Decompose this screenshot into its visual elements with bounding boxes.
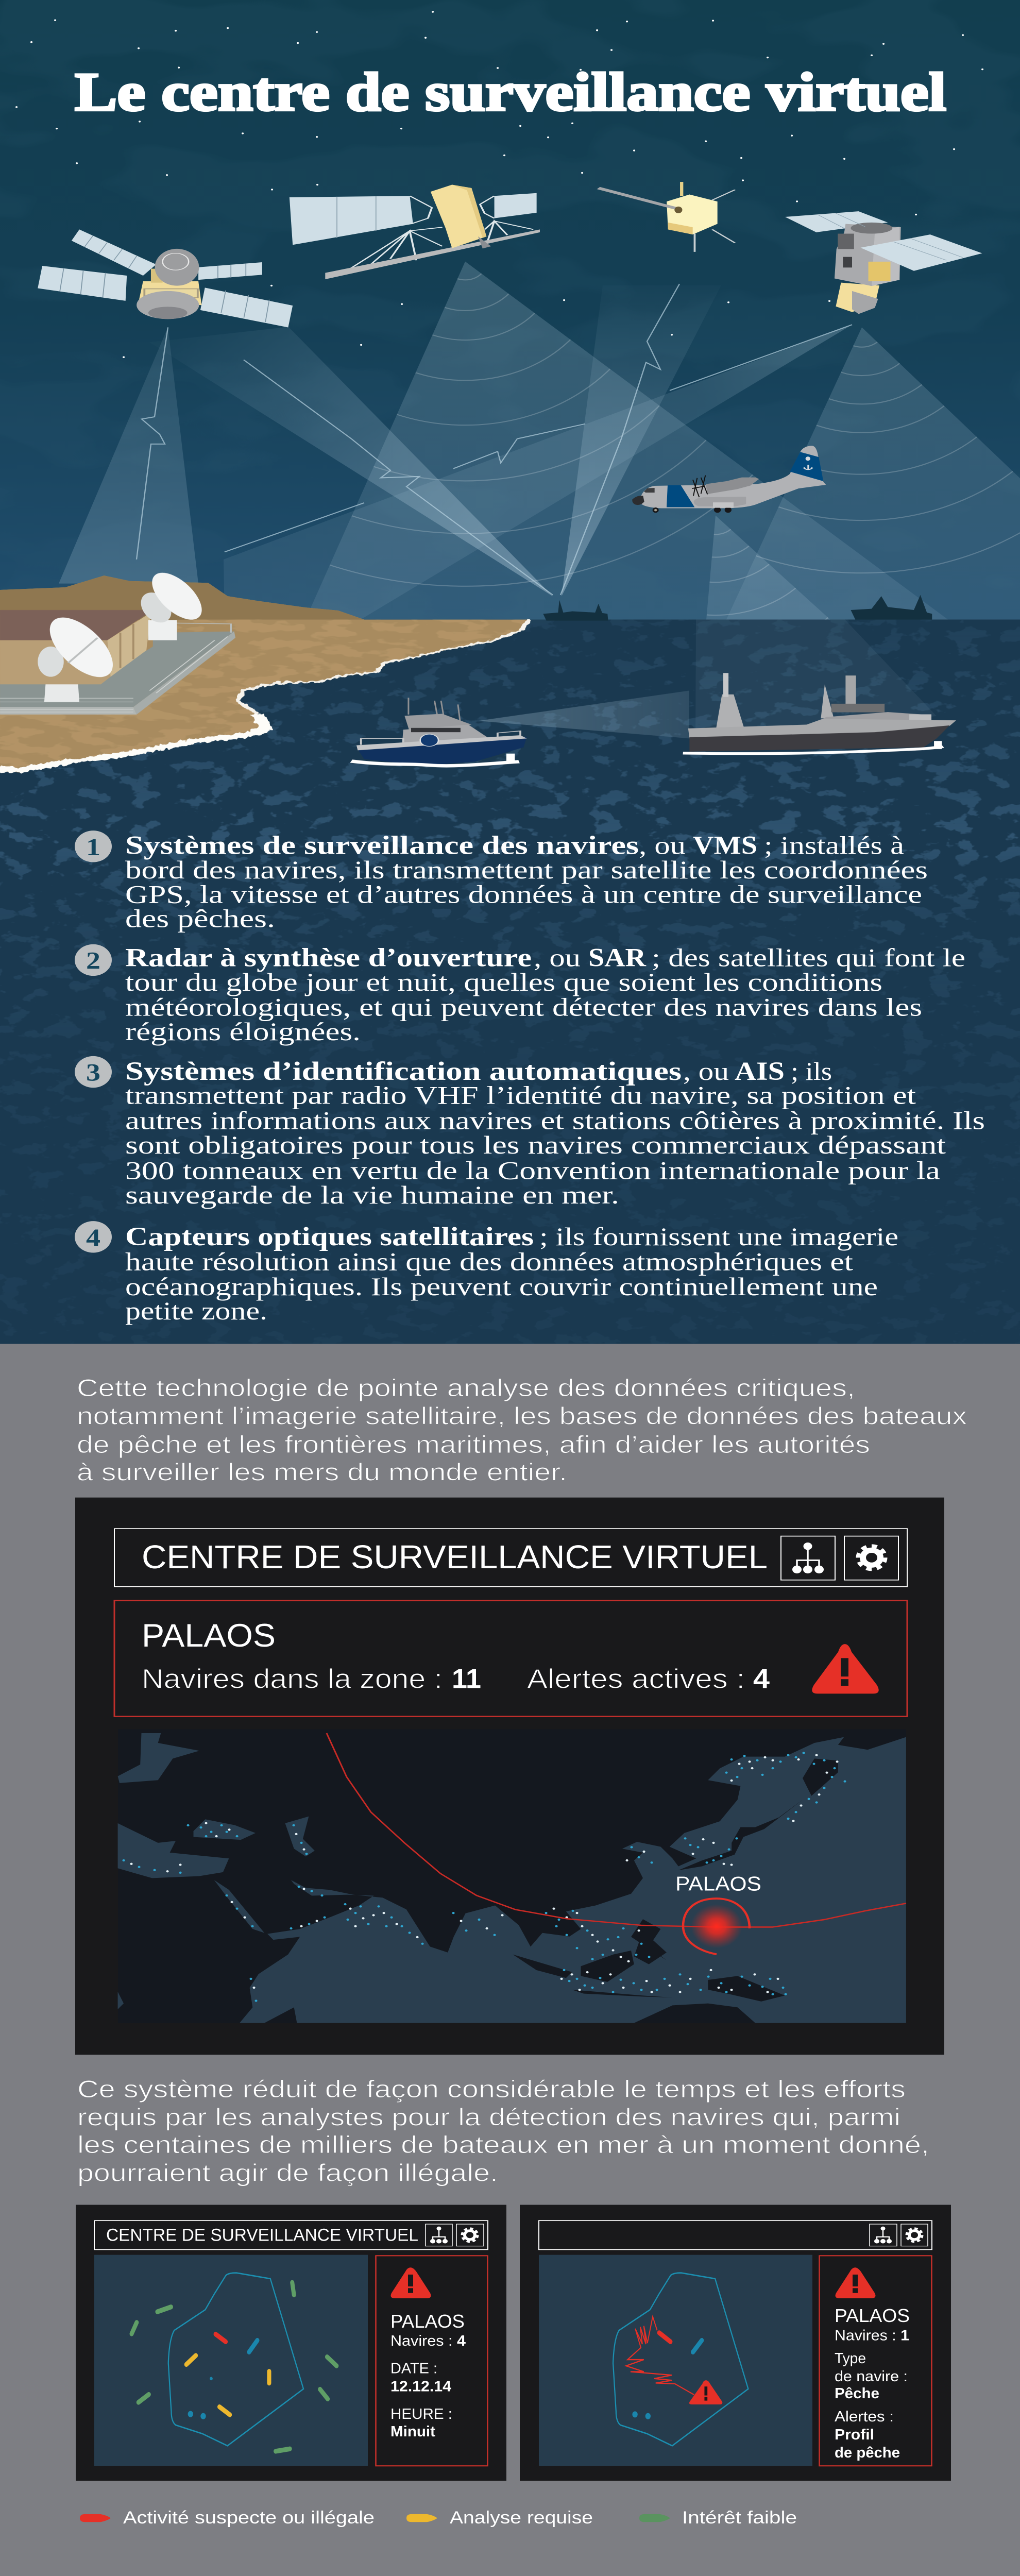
info box B: PALAOS [835,2306,910,2326]
item 2: SAR: , ou [534,943,581,972]
badge 2 [75,944,112,976]
vessel detections [124,1753,845,2001]
satellite 4: optical [785,211,982,314]
legend: suspect: Activité suspecte ou illégale [123,2507,375,2527]
info box B: de pêche [835,2444,900,2461]
small dashboard A [76,2205,506,2481]
satellite 2: radar [290,184,540,279]
icon: warning triangle [812,1644,879,1693]
item 2: SAR: ; des satellites qui font le [652,943,965,972]
signal beams [59,262,1020,619]
info box A: Minuit [390,2423,435,2440]
item 4: optical sensors: ; ils fournissent une imagerie [539,1223,898,1251]
item 1: VMS [75,831,928,933]
alert box: 4 [753,1664,770,1694]
item 4: optical sensors [75,1221,898,1325]
item 3: AIS: 300 tonneaux en vertu de la Convention internationale pour la [125,1156,940,1184]
icon: warning [836,2267,875,2298]
item 3: AIS: autres informations aux navires et stations côtières à proximité. Ils [125,1106,985,1134]
dashboard header: CENTRE DE SURVEILLANCE VIRTUEL [142,1538,768,1575]
Palau position: PALAOS [675,1873,761,1895]
trawler [683,673,956,754]
patrol boat to trawler beam [478,690,689,738]
info box B: Navires : 1 [835,2327,909,2344]
vessels [132,2282,336,2451]
icon: warning on track [689,2380,722,2404]
alert box: Alertes actives : [527,1664,745,1694]
item 2: SAR: régions éloignées. [125,1018,361,1046]
item 1: VMS: ; installés à [764,831,904,859]
item 3: AIS [75,1056,985,1209]
plane [632,446,826,513]
zone boundary [613,2273,748,2446]
legend: analysis: Analyse requise [450,2507,593,2527]
paragraph: technology: Cette technologie de pointe analyse des données critiques, [77,1375,855,1402]
beam over sea [695,620,937,741]
header A: CENTRE DE SURVEILLANCE VIRTUEL [106,2225,418,2245]
ground station [0,571,235,715]
small dashboard B [520,2205,951,2481]
info box B: Alertes : [835,2408,894,2425]
patrol boat [351,698,527,766]
dashboard header [114,1529,907,1587]
item 3: AIS: AIS [735,1057,785,1086]
info box B: de navire : [835,2367,908,2384]
alert box: 11 [452,1664,481,1694]
alert box: Navires dans la zone : [142,1664,443,1694]
info box A: PALAOS [390,2312,465,2332]
badge 4: 4 [86,1225,100,1251]
alert box: PALAOS [142,1617,276,1654]
Palau position [327,1733,906,1954]
item 3: AIS: transmettent par radio VHF l’identité du navire, sa position et [125,1081,916,1110]
item 3: AIS: sont obligatoires pour tous les navires commerciaux dépassant [125,1131,946,1159]
stars [16,12,982,357]
item 4: optical sensors: océanographiques. Ils peuvent couvrir continuellement une [125,1273,878,1301]
badge 2: 2 [86,947,100,974]
info box A [376,2256,487,2466]
section: sea background [0,620,1020,1344]
lightning signals [137,284,852,595]
zone boundary [168,2273,303,2446]
item 2: SAR: Radar à synthèse d’ouverture [125,943,532,972]
paragraph: system: les centaines de milliers de bateaux en mer à un moment donné, [77,2131,929,2159]
item 4: optical sensors: Capteurs optiques satellitaires [125,1222,534,1251]
item 2: SAR [75,943,965,1046]
dashboard panel [75,1498,944,2055]
land [0,575,530,773]
paragraph: technology: à surveiller les mers du monde entier. [77,1459,567,1486]
icon: network [781,1536,835,1580]
badge 3: 3 [86,1059,100,1087]
paragraph: system: pourraient agir de façon illégale. [77,2159,498,2187]
satellite 3: AIS [599,182,735,252]
badge 1 [75,831,112,862]
icon: settings gear [844,1536,898,1580]
info box A: Navires : 4 [390,2332,466,2349]
legend: low interest: Intérêt faible [682,2507,797,2527]
item 3: AIS: Systèmes d’identification automatiques [125,1057,682,1086]
suspect vessel track [626,2316,694,2395]
info box B: Profil [835,2426,874,2443]
info box B [819,2256,931,2466]
paragraph: system [77,2076,929,2187]
item 1: VMS: bord des navires, ils transmettent par satellite les coordonnées [125,856,928,884]
item 2: SAR: tour du globe jour et nuit, quelles que soient les conditions [125,968,882,996]
satellite 1: dish [38,229,293,328]
horizon ships [543,595,932,621]
alert box [114,1601,907,1717]
section: grey background [0,1344,1020,2576]
paragraph: technology: notamment l’imagerie satellitaire, les bases de données des bateaux [77,1402,967,1430]
info box B: Pêche [835,2384,879,2402]
item 3: AIS: , ou [683,1057,729,1086]
info box B: Type [835,2349,866,2366]
item 1: VMS: , ou [639,831,686,859]
item 2: SAR: météorologiques, et qui peuvent détecter des navires dans les [125,993,922,1022]
info box A: 12.12.14 [390,2378,451,2395]
section: hero sky [0,0,1020,620]
info box A: DATE : [390,2360,437,2377]
paragraph: system: Ce système réduit de façon considérable le temps et les efforts [77,2076,906,2103]
item 2: SAR: SAR [588,943,647,972]
item 1: VMS: VMS [693,831,757,860]
icon: warning [391,2267,431,2298]
map: Indian Ocean and West Pacific [118,1729,906,2023]
title: Le centre de surveillance virtuel [75,61,946,122]
item 4: optical sensors: haute résolution ainsi que des données atmosphériques et [125,1247,853,1276]
info box A: HEURE : [390,2405,452,2422]
badge 1: 1 [86,834,100,861]
paragraph: technology: de pêche et les frontières maritimes, afin d’aider les autorités [77,1431,870,1459]
item 3: AIS: ; ils [791,1057,832,1086]
zone map B [539,2255,812,2466]
item 1: VMS: Systèmes de surveillance des navires [125,831,639,860]
header B [539,2221,932,2249]
header A [94,2221,488,2249]
paragraph: technology [77,1375,967,1486]
item 4: optical sensors: petite zone. [125,1297,267,1325]
badge 4 [75,1221,112,1252]
badge 3 [75,1056,112,1088]
paragraph: system: requis par les analystes pour la détection des navires qui, parmi [77,2104,900,2131]
legend [80,2507,797,2527]
surf along the coast [0,620,530,770]
item 3: AIS: sauvegarde de la vie humaine en mer. [125,1181,619,1209]
item 1: VMS: des pêches. [125,905,275,933]
item 1: VMS: GPS, la vitesse et d’autres données à un centre de surveillance [125,880,922,909]
zone map A [94,2255,368,2466]
